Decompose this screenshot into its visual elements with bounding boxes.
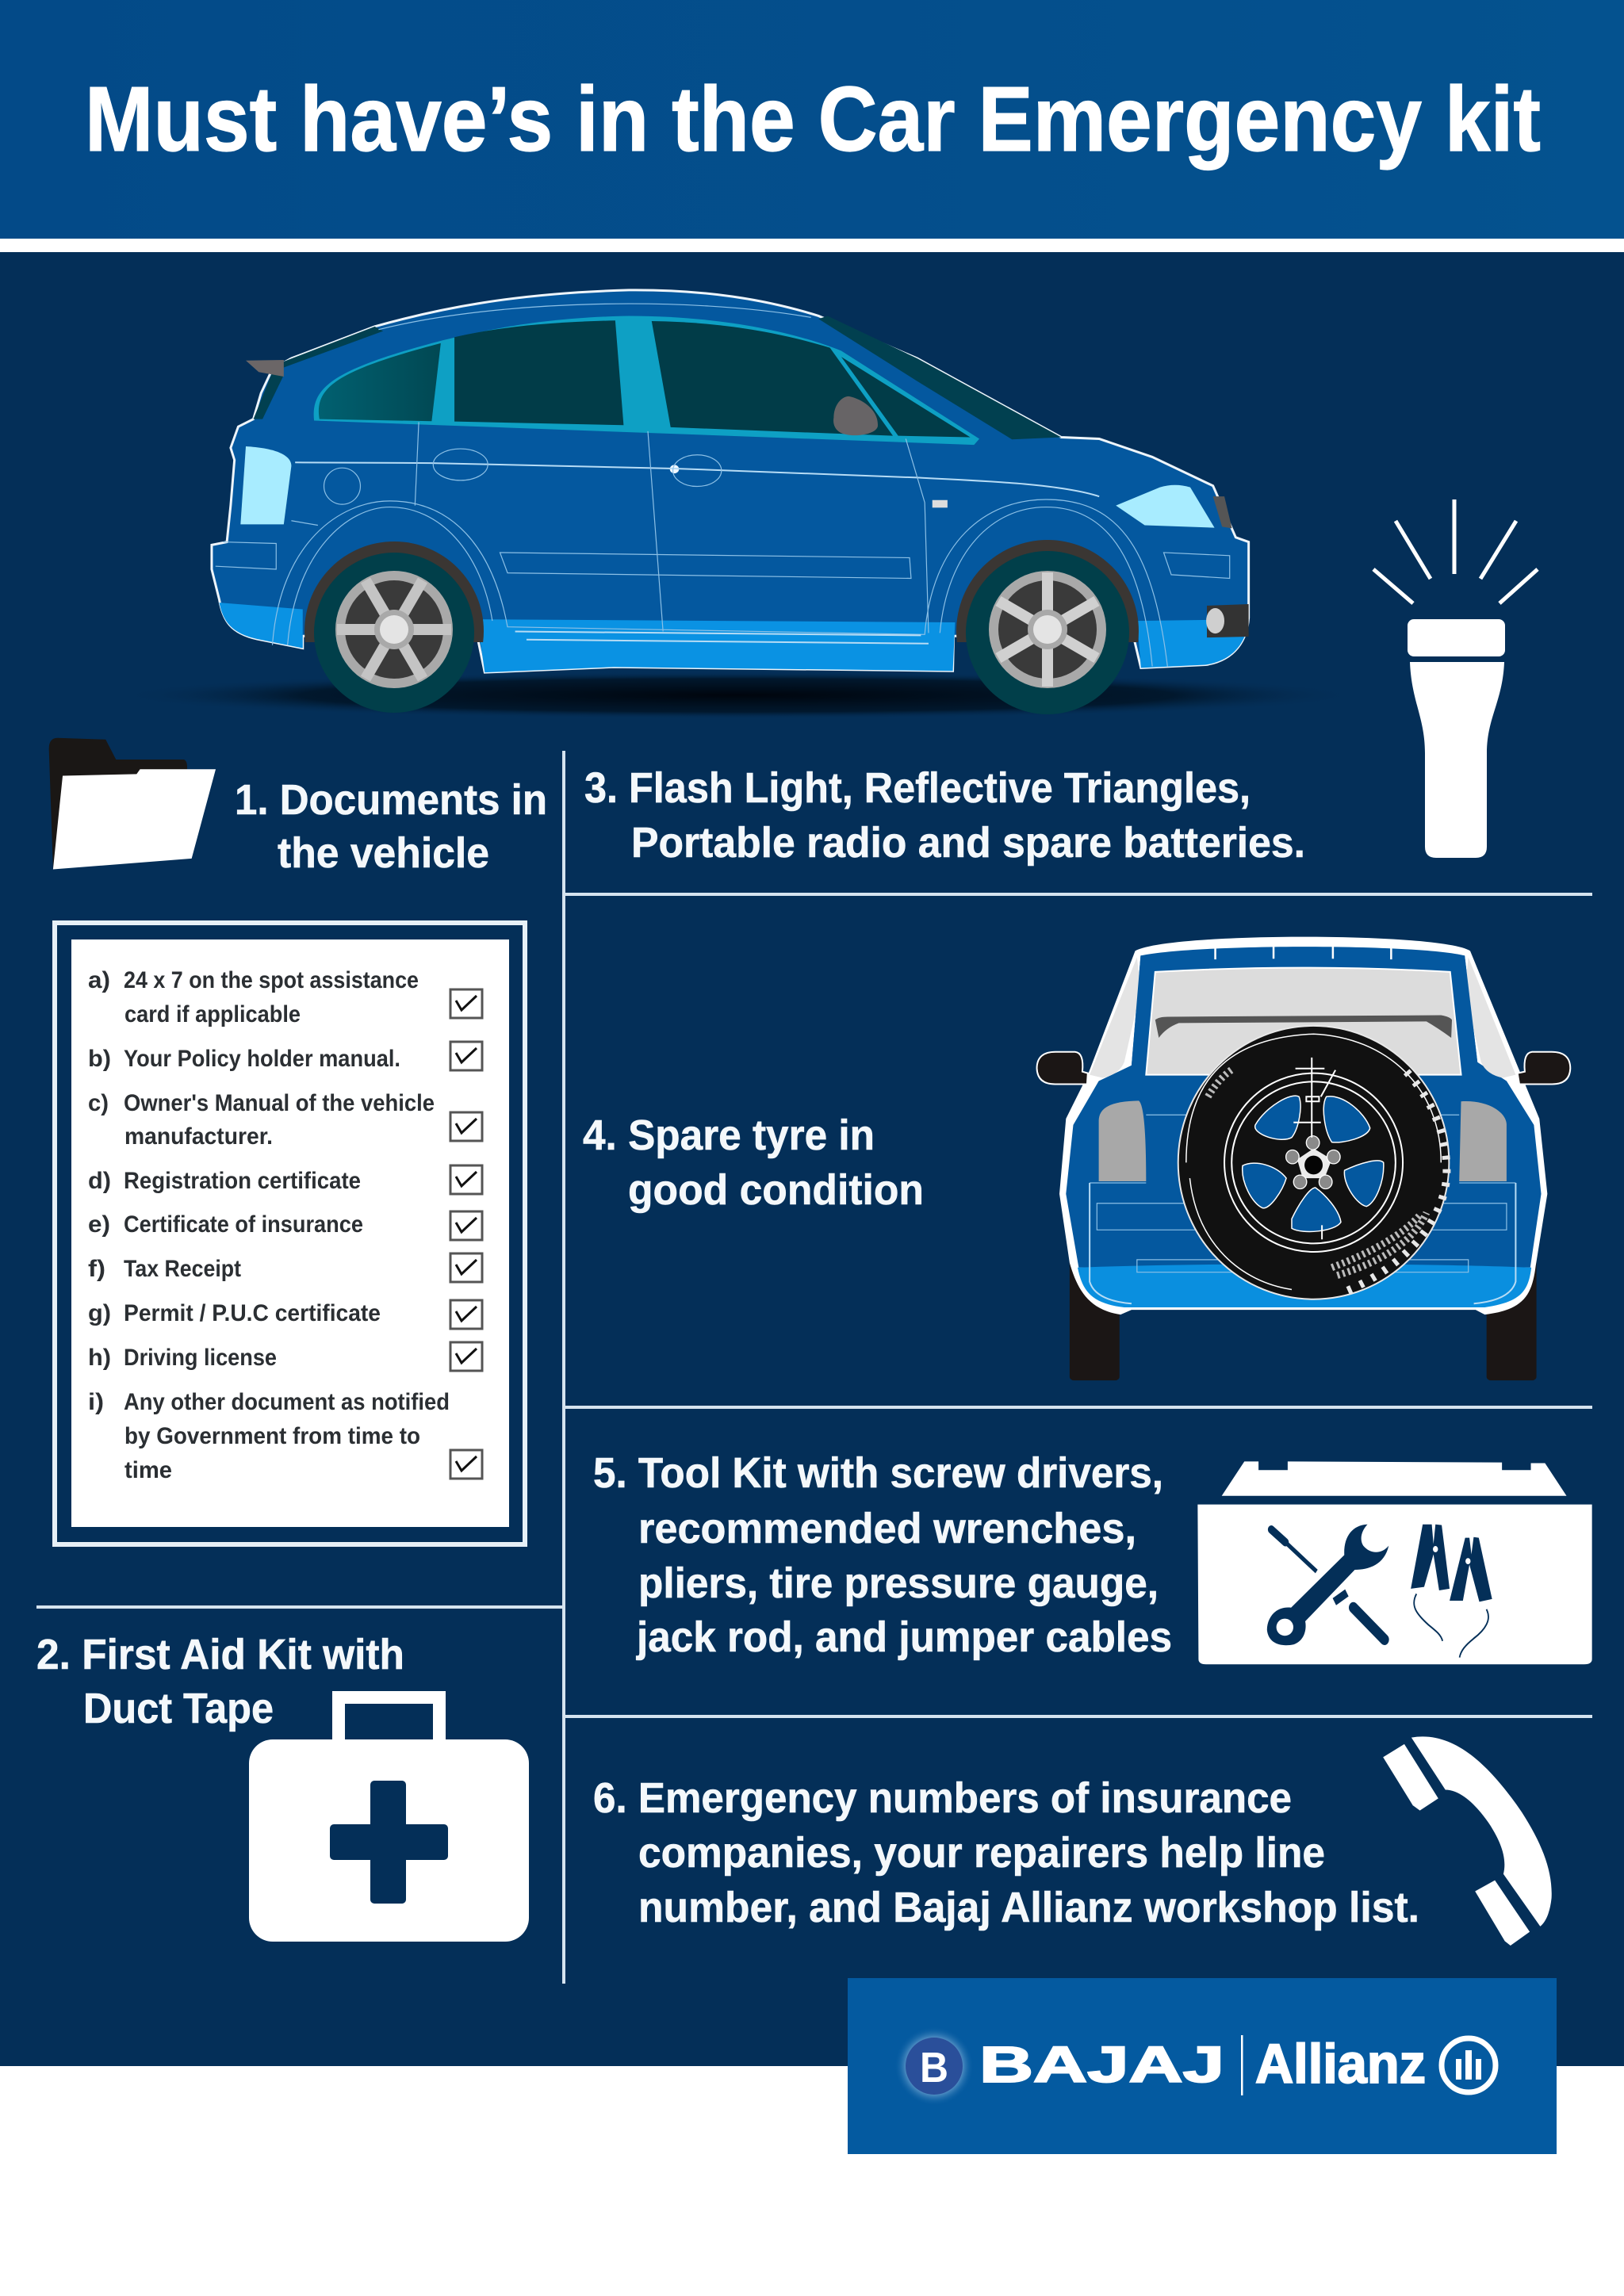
header banner bbox=[0, 0, 1624, 239]
icon: tool box bbox=[1197, 1461, 1592, 1664]
checklist text: manufacturer. bbox=[124, 1123, 273, 1150]
checklist text: Certificate of insurance bbox=[124, 1211, 363, 1238]
heading: 1. Documents in the vehicle: 1. Documents in bbox=[235, 776, 547, 824]
heading: 4. Spare tyre bbox=[583, 1112, 924, 1214]
Bajaj emblem: B bbox=[920, 2044, 948, 2091]
heading: 3. Flash Light bbox=[584, 764, 1305, 867]
heading: 1. Documents in the vehicle bbox=[235, 776, 547, 877]
logo panel: Bajaj Allianz bbox=[848, 1978, 1557, 2154]
heading: 5. Tool Kit bbox=[593, 1449, 1172, 1661]
heading: 6. Emergency numbers bbox=[593, 1774, 1419, 1931]
checklist text: Your Policy holder manual. bbox=[124, 1046, 400, 1072]
divider: section 5 and 6 bbox=[564, 1715, 1592, 1718]
heading: 2. First Aid Kit: Duct Tape bbox=[83, 1685, 274, 1732]
checklist text: h) bbox=[88, 1345, 111, 1371]
checklist text: f) bbox=[88, 1256, 105, 1282]
heading: 6. Emergency numbers: number, and Bajaj Allianz workshop list. bbox=[638, 1884, 1419, 1931]
heading: 2. First Aid Kit: 2. First Aid Kit with bbox=[36, 1631, 404, 1678]
heading: 6. Emergency numbers: companies, your repairers help line bbox=[638, 1829, 1325, 1877]
jumper clips bbox=[1411, 1525, 1492, 1601]
wrench bbox=[1267, 1525, 1388, 1645]
checklist text: 24 x 7 on the spot assistance bbox=[124, 967, 419, 993]
checklist text: i) bbox=[88, 1389, 104, 1415]
divider: section 1 and 2 bbox=[36, 1605, 564, 1609]
checkboxes bbox=[450, 989, 482, 1479]
illustration: blue car side view bbox=[212, 290, 1249, 722]
heading: 5. Tool Kit: pliers, tire pressure gauge, bbox=[638, 1559, 1159, 1607]
checklist text: Owner's Manual of the vehicle bbox=[124, 1090, 435, 1116]
divider: section 3 and 4 bbox=[564, 893, 1592, 896]
checklist text: time bbox=[124, 1457, 172, 1483]
panel: documents checklist bbox=[55, 923, 525, 1544]
heading: 5. Tool Kit: 5. Tool Kit with screw drivers, bbox=[593, 1449, 1163, 1497]
illustration: car rear with spare tyre bbox=[1037, 937, 1570, 1380]
checklist text bbox=[88, 967, 450, 1483]
heading: 3. Flash Light: 3. Flash Light, Reflective Triangles, bbox=[584, 764, 1251, 812]
heading: 2. First Aid Kit bbox=[36, 1631, 404, 1732]
heading: 5. Tool Kit: recommended wrenches, bbox=[638, 1505, 1136, 1552]
icon: flashlight bbox=[1373, 499, 1538, 858]
checklist text: b) bbox=[88, 1046, 111, 1072]
checklist text: Permit / P.U.C certificate bbox=[124, 1300, 381, 1326]
Bajaj wordmark: BAJAJ bbox=[979, 2036, 1224, 2093]
checklist text: a) bbox=[88, 967, 110, 993]
checklist text: Any other document as notified bbox=[124, 1389, 450, 1415]
screwdriver bbox=[1271, 1529, 1285, 1542]
checklist text: card if applicable bbox=[124, 1001, 301, 1027]
checklist text: by Government from time to bbox=[124, 1423, 420, 1449]
icon: first aid kit bbox=[249, 1697, 529, 1942]
icon: folder bbox=[49, 738, 216, 870]
spare tyre bbox=[1178, 1026, 1449, 1299]
checklist text: g) bbox=[88, 1300, 111, 1326]
car ground shadow bbox=[115, 672, 1360, 719]
heading: 6. Emergency numbers: 6. Emergency numbers of insurance bbox=[593, 1774, 1292, 1822]
icon: telephone handset bbox=[1383, 1736, 1552, 1946]
heading: 5. Tool Kit: jack rod, and jumper cables bbox=[636, 1613, 1172, 1661]
Allianz wordmark: Allianz bbox=[1255, 2033, 1426, 2095]
checklist text: Driving license bbox=[124, 1345, 277, 1371]
logo divider bbox=[1241, 2035, 1243, 2095]
heading: 1. Documents in the vehicle: the vehicle bbox=[278, 829, 489, 877]
checklist text: Registration certificate bbox=[124, 1168, 361, 1194]
checklist text: d) bbox=[88, 1168, 111, 1194]
Allianz emblem bbox=[1442, 2038, 1496, 2092]
checklist text: e) bbox=[88, 1211, 110, 1238]
divider: section 4 and 5 bbox=[564, 1406, 1592, 1409]
heading: 4. Spare tyre: good condition bbox=[628, 1166, 924, 1214]
divider: vertical bbox=[562, 751, 565, 1984]
heading: 3. Flash Light: Portable radio and spare batteries. bbox=[631, 819, 1305, 867]
checklist text: Tax Receipt bbox=[124, 1256, 241, 1282]
dark navy background panel bbox=[0, 252, 1624, 2066]
Bajaj emblem bbox=[894, 2026, 974, 2106]
checklist text: c) bbox=[88, 1090, 109, 1116]
heading: 4. Spare tyre: 4. Spare tyre in bbox=[583, 1112, 875, 1159]
